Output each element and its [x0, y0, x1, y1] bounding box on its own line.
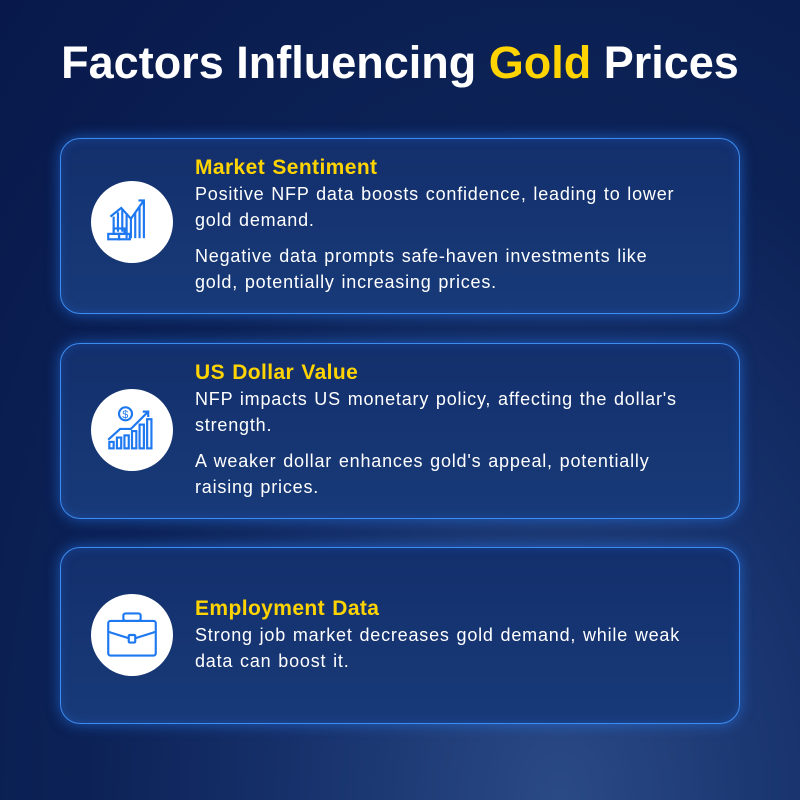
panel: market sentiment: [60, 138, 740, 314]
panel: employment data: [60, 547, 740, 724]
icon: dollar growth: $: [122, 409, 128, 421]
text: employment data: Strong job market decreases gold demand, while weak: [195, 625, 680, 645]
icon: briefcase: [91, 594, 173, 676]
text: employment data: [195, 597, 680, 671]
icon: dollar growth: [91, 389, 173, 471]
title: Factors Influencing Gold Prices: [61, 37, 739, 88]
text: us dollar value: [195, 361, 677, 497]
text: market sentiment: gold demand.: [195, 210, 315, 230]
text: market sentiment: Positive NFP data boosts confidence, leading to lower: [195, 184, 674, 204]
text: employment data: data can boost it.: [195, 651, 350, 671]
text: us dollar value: strength.: [195, 415, 272, 435]
text: market sentiment: Market Sentiment: [195, 156, 377, 179]
text: market sentiment: [195, 156, 674, 292]
text: market sentiment: gold, potentially increasing prices.: [195, 272, 497, 292]
icon: chart with gold bars: [91, 181, 173, 263]
text: employment data: Employment Data: [195, 597, 379, 620]
text: us dollar value: US Dollar Value: [195, 361, 358, 384]
panel: us dollar value: [60, 343, 740, 519]
text: us dollar value: A weaker dollar enhances gold's appeal, potentially: [195, 451, 650, 471]
text: us dollar value: NFP impacts US monetary policy, affecting the dollar's: [195, 389, 677, 409]
text: us dollar value: raising prices.: [195, 477, 319, 497]
text: market sentiment: Negative data prompts safe-haven investments like: [195, 246, 647, 266]
